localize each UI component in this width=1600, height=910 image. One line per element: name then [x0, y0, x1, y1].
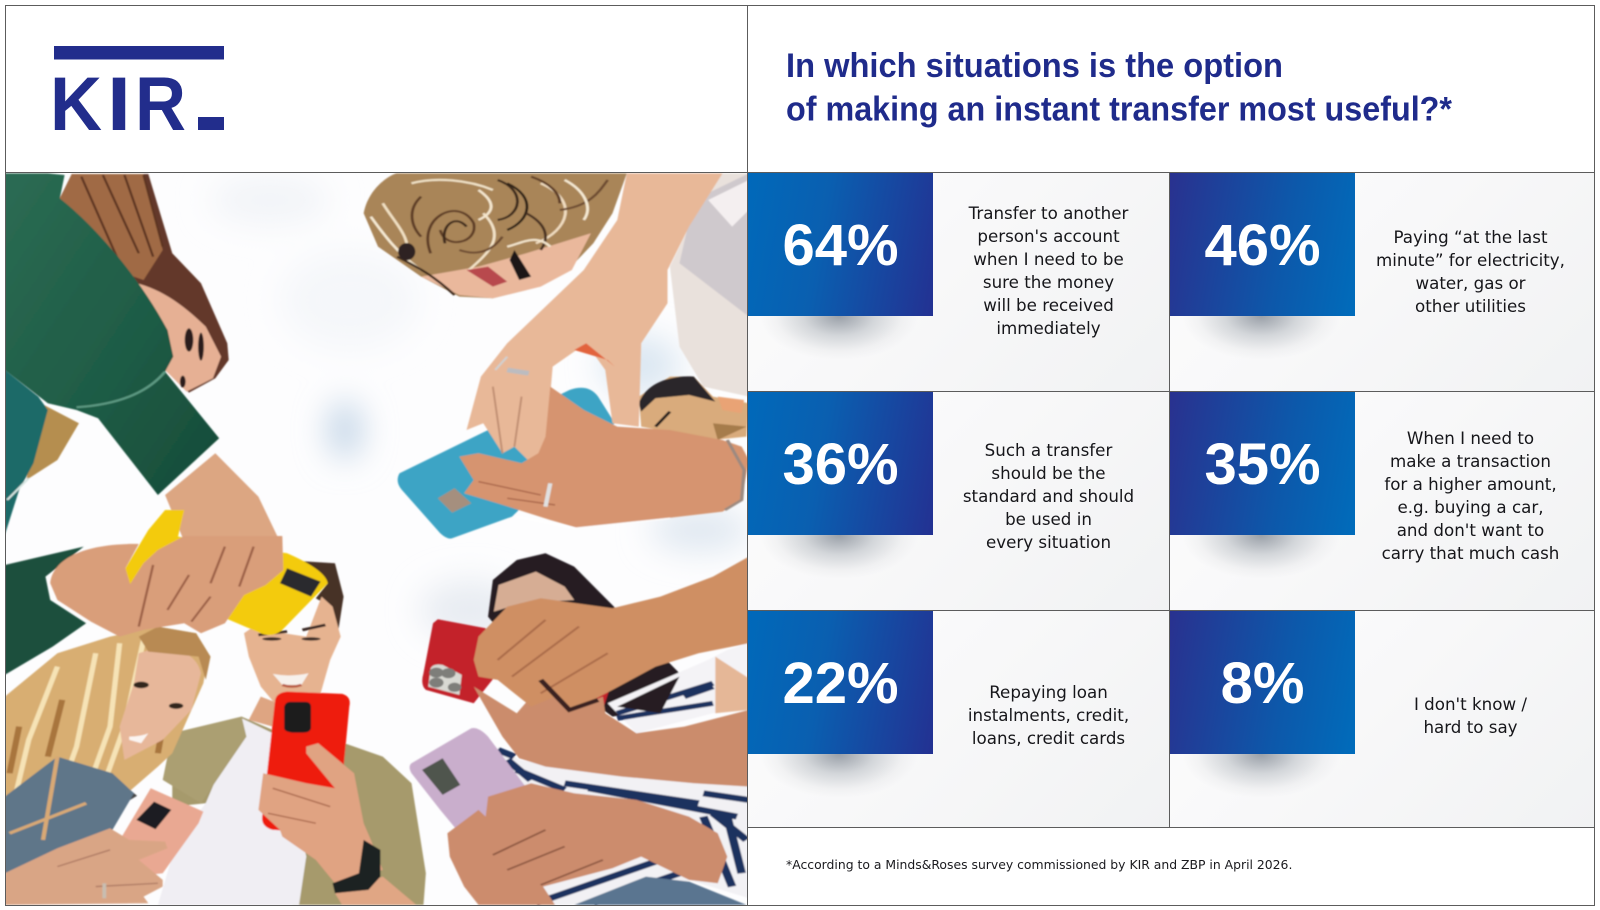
value [1170, 611, 1355, 754]
description: immediately [996, 318, 1101, 338]
card shadow [760, 754, 918, 798]
top arm and hand [467, 173, 723, 463]
logo: KIR: I [107, 62, 131, 147]
logo: KIR: K [50, 62, 102, 147]
description: other utilities [1415, 296, 1526, 316]
statistic cell: 35% [1170, 392, 1595, 611]
description: Repaying loan [989, 682, 1108, 702]
description: should be the [991, 463, 1106, 483]
description: when I need to be [973, 249, 1124, 269]
logo: KIR: R [135, 62, 186, 147]
value: 64% [782, 213, 899, 278]
description: Paying “at the last [1393, 227, 1548, 247]
statistic cell: 36% [748, 392, 1170, 611]
description [1414, 694, 1527, 737]
value [748, 173, 933, 316]
description [963, 440, 1134, 552]
hand on lavender [447, 783, 727, 905]
photo: group of friends using smartphones seen from below [6, 173, 747, 905]
description: carry that much cash [1382, 543, 1559, 563]
hand lower right [474, 680, 749, 787]
header panel: logo [5, 5, 747, 173]
description: person's account [977, 226, 1120, 246]
peach phone and hand [103, 788, 203, 880]
big hand right [474, 557, 749, 710]
heading [786, 47, 1453, 128]
wrist [165, 453, 280, 542]
description: minute” for electricity, [1376, 250, 1565, 270]
yellow phone [123, 510, 328, 635]
description: loans, credit cards [972, 728, 1125, 748]
lavender phone [410, 728, 543, 842]
description: standard and should [963, 486, 1134, 506]
value [1170, 173, 1355, 316]
description: Such a transfer [985, 440, 1112, 460]
logo: KIR [50, 46, 224, 147]
description [968, 203, 1128, 338]
description: instalments, credit, [968, 705, 1129, 725]
teal and blond [26, 403, 79, 480]
right top woman [488, 553, 679, 717]
second hand on phone [459, 387, 749, 528]
value [1170, 392, 1355, 535]
statistic cell: 8% [1170, 611, 1595, 828]
description: hard to say [1423, 717, 1518, 737]
value [748, 392, 933, 535]
footnote: *According to a Minds&Roses survey commissioned by KIR and ZBP in April 2026. [786, 857, 1292, 872]
value: 8% [1221, 651, 1304, 716]
description: and don't want to [1397, 520, 1544, 540]
left sleeve [5, 547, 86, 675]
brown hair and face [60, 174, 229, 393]
description [1376, 227, 1565, 316]
description: water, gas or [1415, 273, 1526, 293]
value: 36% [782, 432, 899, 497]
description: When I need to [1407, 428, 1534, 448]
hand holding yellow phone [50, 536, 283, 637]
description: will be received [983, 295, 1114, 315]
description: sure the money [983, 272, 1114, 292]
description: e.g. buying a car, [1397, 497, 1544, 517]
description: every situation [986, 532, 1111, 552]
striped shirt [498, 747, 749, 905]
blond woman [5, 627, 208, 873]
hand on red phone [258, 743, 383, 883]
card shadow [1182, 535, 1340, 579]
white top [670, 173, 749, 397]
description: I don't know / [1414, 694, 1527, 714]
card shadow [1182, 754, 1340, 798]
statistic cell: 22% [748, 611, 1170, 828]
man in background [639, 377, 749, 440]
heading: of making an instant transfer most useful?* [786, 90, 1453, 128]
green sweater [5, 173, 219, 495]
value: 35% [1204, 432, 1321, 497]
description [1382, 428, 1559, 563]
white tee and jacket [172, 717, 426, 905]
curly blond hair [364, 173, 627, 298]
description: for a higher amount, [1384, 474, 1557, 494]
red phone [262, 692, 350, 833]
description: make a transaction [1390, 451, 1551, 471]
denim bottom right [574, 877, 746, 905]
statistic cell: 46% [1170, 173, 1595, 392]
title panel [748, 5, 1595, 173]
upper stripes and arm [608, 643, 749, 733]
blue phone [398, 388, 615, 539]
statistic cell: 64% [748, 173, 1170, 392]
man hair and face [282, 560, 344, 637]
dark-red phone [422, 619, 498, 703]
value: 22% [782, 651, 899, 716]
description: Transfer to another [969, 203, 1128, 223]
description: be used in [1005, 509, 1092, 529]
heading: In which situations is the option [786, 47, 1283, 85]
description [968, 682, 1129, 748]
value: 46% [1204, 213, 1321, 278]
card shadow [760, 535, 918, 579]
value [748, 611, 933, 754]
card shadow [760, 316, 918, 360]
card shadow [1182, 316, 1340, 360]
